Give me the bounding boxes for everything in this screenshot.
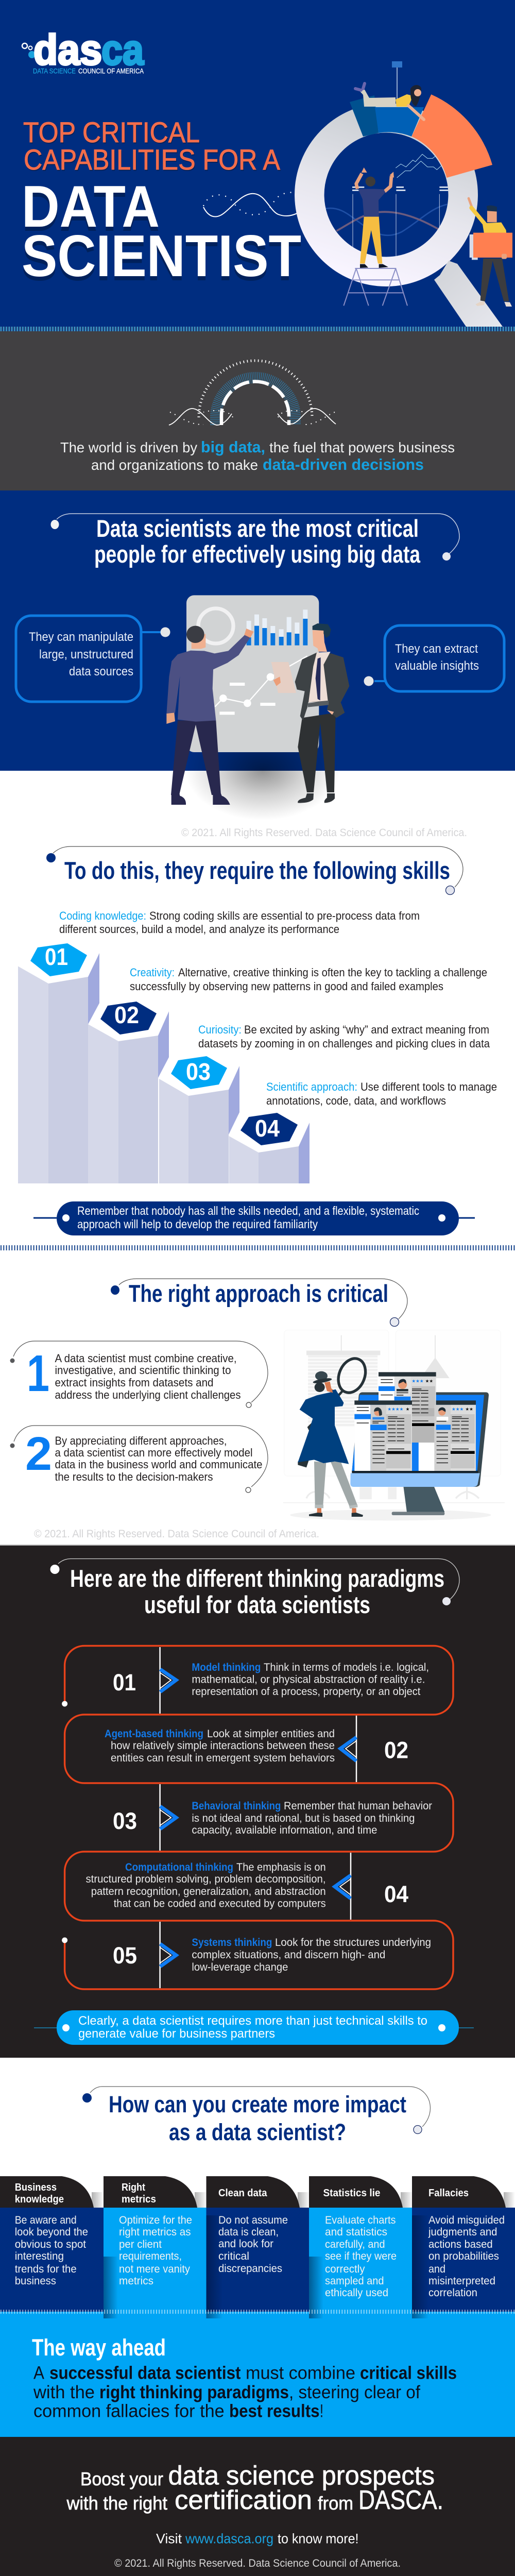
illustration: detective and resumes on monitor <box>283 1330 505 1520</box>
hero title: CAPABILITIES FOR A <box>24 143 281 176</box>
chart: descending steps <box>18 943 310 1183</box>
section background: way ahead <box>0 2311 515 2437</box>
text: coding knowledge: Strong coding skills are essential to pre-process data from <box>149 909 420 922</box>
approach point 2 <box>10 1426 268 1493</box>
rating stars: ★★★ <box>452 1407 464 1412</box>
approach point 1: 1 <box>27 1345 49 1402</box>
panel: the way ahead: must combine <box>246 2363 355 2383</box>
footer: website: Visit <box>156 2531 182 2546</box>
banner text: big data: The world is driven by <box>60 439 197 455</box>
footer: website: to know more! <box>278 2531 358 2546</box>
paradigm 03: behavioral thinking: 03 <box>113 1808 137 1834</box>
tab shadows <box>92 2192 515 2208</box>
callout: more than technical skills: generate value for business partners <box>78 2027 275 2041</box>
banner text: big data: big data, <box>201 438 265 456</box>
tab: statistics lie <box>309 2176 403 2208</box>
tab: business knowledge: knowledge <box>15 2193 64 2205</box>
resume card right <box>412 1400 476 1471</box>
donut chart <box>198 608 233 643</box>
approach point 2: 2 <box>25 1428 52 1480</box>
figure: woman lying on chart <box>355 83 424 120</box>
hero title: DATA <box>22 174 160 240</box>
hero title: TOP CRITICAL <box>23 116 200 148</box>
text: curiosity <box>198 1023 490 1050</box>
approach point 2: data in the business world and communicate <box>55 1458 263 1471</box>
paradigm 03: behavioral thinking: capacity, available information, and time <box>192 1824 377 1836</box>
rating stars: ★★ <box>425 1379 433 1384</box>
text: coding knowledge: different sources, build a model, and analyze its performance <box>59 923 339 936</box>
panel: the way ahead: successful data scientist <box>49 2363 241 2383</box>
bar chart <box>247 609 307 646</box>
text: business knowledge: trends for the <box>15 2263 77 2275</box>
paradigm 02: agent-based thinking: entities can result in emergent system behaviors <box>111 1752 335 1764</box>
text: statistics lie: Evaluate charts <box>325 2214 396 2226</box>
text: creativity: successfully by observing new patterns in good and failed examples <box>130 980 443 993</box>
callout: manipulate data: data sources <box>69 665 133 679</box>
banner text: big data: data-driven decisions <box>263 455 424 473</box>
callout: more than technical skills: Clearly, a data scientist requires more than just technical skills to <box>78 2014 427 2028</box>
panel: the way ahead: ! <box>320 2401 323 2421</box>
text: fallacies: Avoid misguided <box>428 2214 505 2226</box>
paradigm 05: systems thinking <box>113 1922 431 1988</box>
panel: the way ahead: common fallacies for the <box>33 2401 225 2421</box>
text: clean data: data is clean, <box>218 2226 279 2238</box>
approach point 1: A data scientist must combine creative, <box>55 1352 237 1365</box>
approach point 1: address the underlying client challenges <box>55 1388 241 1401</box>
section background: footer <box>0 2437 515 2576</box>
tab: business knowledge: Business <box>15 2181 57 2193</box>
panel: the way ahead: best results <box>229 2401 319 2421</box>
text: clean data: critical <box>218 2250 249 2262</box>
paradigm 02: agent-based thinking: how relatively simple interactions between these <box>111 1740 335 1752</box>
figure: man holding orange board <box>469 198 512 307</box>
heading: create more impact: How can you create more impact <box>109 2091 406 2117</box>
text: coding knowledge <box>59 909 420 936</box>
heading: create more impact: as a data scientist? <box>169 2119 346 2145</box>
step 03 badge: 03 <box>186 1058 211 1085</box>
text: scientific approach <box>266 1080 497 1107</box>
resume card centre <box>379 1372 439 1445</box>
text: right metrics: metrics <box>119 2275 153 2287</box>
text: business knowledge: Be aware and <box>15 2214 77 2226</box>
step 01 badge <box>30 943 87 976</box>
callout: manipulate data <box>16 616 170 702</box>
approach point 2: the results to the decision-makers <box>55 1470 213 1483</box>
paradigm 01: model thinking: 01 <box>113 1669 136 1696</box>
step 02 badge: 02 <box>114 1002 139 1028</box>
callout: remember <box>33 1201 475 1235</box>
text: statistics lie: carefully, and <box>325 2239 385 2250</box>
tick strip under hero <box>0 327 515 331</box>
paradigm 04: computational thinking: Computational thinking <box>125 1861 233 1873</box>
icon: data arc gauge <box>169 361 336 425</box>
approach point 1 <box>10 1341 268 1408</box>
text: scientific approach: Use different tools to manage <box>360 1080 497 1093</box>
paradigm 04: computational thinking <box>85 1853 408 1920</box>
text: scientific approach: annotations, code, data, and workflows <box>266 1094 446 1107</box>
section background: hero <box>0 0 515 327</box>
footer: call to action: Boost your <box>80 2468 163 2489</box>
magnifying glass illustration <box>310 61 503 327</box>
heading: right approach <box>111 1279 407 1326</box>
text: statistics lie: and statistics <box>325 2226 387 2238</box>
text: fallacies: on probabilities <box>428 2250 499 2262</box>
hero title: SCIENTIST <box>22 224 301 289</box>
impact columns <box>0 2176 515 2318</box>
text: right metrics: per client <box>119 2239 162 2250</box>
hero data wave <box>203 192 306 217</box>
paradigm 01: model thinking: Think in terms of models i.e. logical, <box>264 1662 429 1673</box>
text: coding knowledge: Coding knowledge: <box>59 909 146 922</box>
text: business knowledge: look beyond the <box>15 2226 88 2238</box>
tab: right metrics: metrics <box>122 2193 156 2205</box>
footer: call to action: DASCA. <box>358 2485 443 2515</box>
rating stars: ★★ <box>465 1407 473 1412</box>
paradigm 03: behavioral thinking: is not ideal and rational, but is based on thinking <box>192 1812 415 1824</box>
footer: call to action <box>66 2461 443 2515</box>
column backgrounds <box>0 2208 515 2318</box>
rating stars <box>387 1379 473 1412</box>
tab: clean data: Clean data <box>218 2187 267 2199</box>
resume card left <box>354 1400 412 1471</box>
logo: DASCA: DATA SCIENCE <box>33 67 76 75</box>
illustration: presenters at board <box>166 595 349 805</box>
footer: call to action: certification <box>175 2485 312 2515</box>
text: business knowledge: interesting <box>15 2250 64 2262</box>
section background: big data banner <box>0 331 515 491</box>
text: creativity: Alternative, creative thinking is often the key to tackling a challenge <box>178 966 487 979</box>
text: clean data: discrepancies <box>218 2263 282 2275</box>
text: fallacies: correlation <box>428 2287 477 2299</box>
detective figure <box>298 1354 370 1517</box>
text: statistics lie: see if they were <box>325 2250 397 2262</box>
logo: DASCA: das <box>33 26 102 74</box>
text: clean data <box>218 2214 288 2275</box>
text: curiosity: Curiosity: <box>198 1023 242 1036</box>
paradigm 04: computational thinking: 04 <box>384 1881 408 1907</box>
paradigm 02: agent-based thinking: Agent-based thinking <box>105 1728 203 1740</box>
paradigm 04: computational thinking: The emphasis is on <box>236 1861 326 1873</box>
paradigm 05: systems thinking: Systems thinking <box>192 1937 272 1948</box>
section rule <box>0 1545 515 1546</box>
paradigm 03: behavioral thinking: Remember that human behavior <box>284 1800 432 1812</box>
text: fallacies: misinterpreted <box>428 2275 495 2287</box>
footer: copyright: © 2021. All Rights Reserved. Data Science Council of America. <box>114 2557 401 2569</box>
callout: manipulate data: They can manipulate <box>29 630 133 644</box>
step 03 badge <box>171 1056 227 1089</box>
callout: remember: approach will help to develop the required familiarity <box>77 1217 318 1231</box>
paradigm 04: computational thinking: structured problem solving, problem decomposition, <box>85 1873 325 1885</box>
paradigm 02: agent-based thinking: Look at simpler entities and <box>207 1728 335 1740</box>
section background: thinking paradigms <box>0 1546 515 2058</box>
tab: statistics lie: Statistics lie <box>323 2187 380 2199</box>
paradigm 04: computational thinking: pattern recognition, generalization, and abstraction <box>91 1886 326 1897</box>
text: statistics lie <box>325 2214 397 2299</box>
text: creativity <box>130 966 487 993</box>
text: right metrics <box>119 2214 192 2287</box>
callout: more than technical skills <box>34 2010 474 2045</box>
heading: create more impact <box>82 2087 431 2145</box>
drop shadow below the board <box>185 721 340 820</box>
monitor <box>350 1392 489 1515</box>
banner text: big data <box>60 438 455 473</box>
rating stars: ★ <box>406 1407 410 1412</box>
figure: man on ladder <box>344 167 407 306</box>
paradigm 01: model thinking: mathematical, or physical abstraction of reality i.e. <box>192 1673 425 1686</box>
step 04 badge <box>241 1113 298 1145</box>
step 02 badge <box>100 1002 157 1035</box>
tick strip <box>0 2310 515 2314</box>
callout: extract insights: valuable insights <box>395 659 479 673</box>
text: creativity: Creativity: <box>130 966 175 979</box>
paradigm 04: computational thinking: that can be coded and executed by computers <box>114 1898 326 1909</box>
text: fallacies: and <box>428 2263 445 2275</box>
callout: manipulate data: large, unstructured <box>39 648 133 662</box>
text: statistics lie: correctly <box>325 2263 365 2275</box>
text: business knowledge <box>15 2214 88 2287</box>
footer: call to action: with the right <box>66 2493 167 2514</box>
step 04 badge: 04 <box>255 1115 280 1142</box>
footer: call to action: from <box>318 2493 353 2514</box>
paradigm 05: systems thinking: 05 <box>113 1942 137 1969</box>
paradigm 05: systems thinking: Look for the structures underlying <box>275 1937 431 1948</box>
callout: extract insights <box>364 625 504 691</box>
logo: DASCA: COUNCIL OF AMERICA <box>78 67 144 75</box>
logo: DASCA <box>22 26 144 75</box>
panel: the way ahead: right thinking paradigms <box>99 2382 289 2402</box>
paradigm 02: agent-based thinking <box>105 1716 408 1782</box>
serpentine timeline path <box>62 1646 453 1989</box>
footer: call to action: data science prospects <box>168 2461 435 2490</box>
board <box>186 595 319 752</box>
text: curiosity: datasets by zooming in on challenges and picking clues in data <box>198 1037 490 1050</box>
heading: right approach: The right approach is critical <box>129 1280 388 1307</box>
text: right metrics: right metrics as <box>119 2226 191 2238</box>
panel: the way ahead: A <box>33 2363 45 2383</box>
copyright notice 2: © 2021. All Rights Reserved. Data Science Council of America. <box>34 1528 319 1540</box>
text: statistics lie: sampled and <box>325 2275 384 2287</box>
footer: website: www.dasca.org <box>185 2531 273 2546</box>
text: fallacies <box>428 2214 505 2299</box>
rating stars: ★★★★ <box>387 1407 404 1412</box>
heading: data scientists are critical <box>50 514 459 568</box>
paradigm 02: agent-based thinking: 02 <box>384 1737 408 1763</box>
text: clean data: and look for <box>218 2238 273 2250</box>
text: business knowledge: business <box>15 2275 56 2287</box>
text: right metrics: requirements, <box>119 2250 182 2262</box>
logo: DASCA: ca <box>101 26 144 74</box>
rating stars: ★★★ <box>411 1379 424 1384</box>
heading: data scientists are critical: Data scientists are the most critical <box>96 515 419 542</box>
approach point 2: By appreciating different approaches, <box>55 1434 227 1447</box>
line chart <box>215 656 307 715</box>
paradigm 03: behavioral thinking <box>113 1784 432 1851</box>
paradigm 01: model thinking <box>113 1647 429 1714</box>
text: statistics lie: ethically used <box>325 2287 388 2299</box>
tab: right metrics <box>104 2176 197 2208</box>
panel: the way ahead: , steering clear of <box>289 2382 420 2402</box>
heading: data scientists are critical: people for effectively using big data <box>94 540 421 568</box>
approach point 1: investigative, and scientific thinking to <box>55 1364 231 1377</box>
callout: remember: Remember that nobody has all the skills needed, and a flexible, systematic <box>77 1204 419 1217</box>
copyright notice 1: © 2021. All Rights Reserved. Data Science Council of America. <box>181 827 467 839</box>
step 01 badge: 01 <box>45 943 68 970</box>
panel: the way ahead: critical skills <box>360 2363 457 2383</box>
tab: fallacies: Fallacies <box>428 2187 469 2199</box>
text: scientific approach: Scientific approach: <box>266 1080 357 1093</box>
paradigm 01: model thinking: Model thinking <box>192 1662 261 1673</box>
callout: extract insights: They can extract <box>395 642 478 656</box>
paradigm 03: behavioral thinking: Behavioral thinking <box>192 1800 281 1812</box>
panel: the way ahead: with the <box>33 2382 95 2402</box>
man in blue jacket <box>166 626 254 805</box>
approach point 1: extract insights from datasets and <box>55 1376 213 1389</box>
tab: clean data <box>206 2176 300 2208</box>
paradigm 05: systems thinking: low-leverage change <box>192 1961 288 1973</box>
panel: the way ahead: The way ahead <box>32 2334 166 2361</box>
text: right metrics: Optimize for the <box>119 2214 192 2226</box>
text: clean data: Do not assume <box>218 2214 288 2226</box>
banner text: big data: and organizations to make <box>91 457 258 473</box>
paradigm 01: model thinking: representation of a process, property, or an object <box>192 1686 421 1698</box>
tab: business knowledge <box>0 2176 94 2208</box>
text: curiosity: Be excited by asking “why” and extract meaning from <box>244 1023 489 1036</box>
heading: skills <box>46 846 463 894</box>
approach point 2: a data scientist can more effectively model <box>55 1446 252 1459</box>
tab: right metrics: Right <box>122 2181 145 2193</box>
tick strip <box>0 1245 515 1250</box>
text: right metrics: not mere vanity <box>119 2263 190 2275</box>
text: fallacies: judgments and <box>428 2226 497 2238</box>
tab: fallacies <box>412 2176 506 2208</box>
banner text: big data: the fuel that powers business <box>269 439 455 455</box>
heading: thinking paradigms: useful for data scientists <box>144 1591 370 1618</box>
heading: thinking paradigms <box>50 1559 459 1618</box>
text: fallacies: actions based <box>428 2239 493 2250</box>
man in grey suit <box>271 623 349 803</box>
hero title <box>22 116 301 289</box>
text: business knowledge: obvious to spot <box>15 2239 86 2250</box>
section background: data scientists <box>0 490 515 771</box>
office background <box>283 1330 505 1520</box>
paradigm 05: systems thinking: complex situations, and discern high- and <box>192 1949 385 1961</box>
panel: the way ahead <box>32 2334 457 2421</box>
footer: website <box>156 2531 358 2546</box>
